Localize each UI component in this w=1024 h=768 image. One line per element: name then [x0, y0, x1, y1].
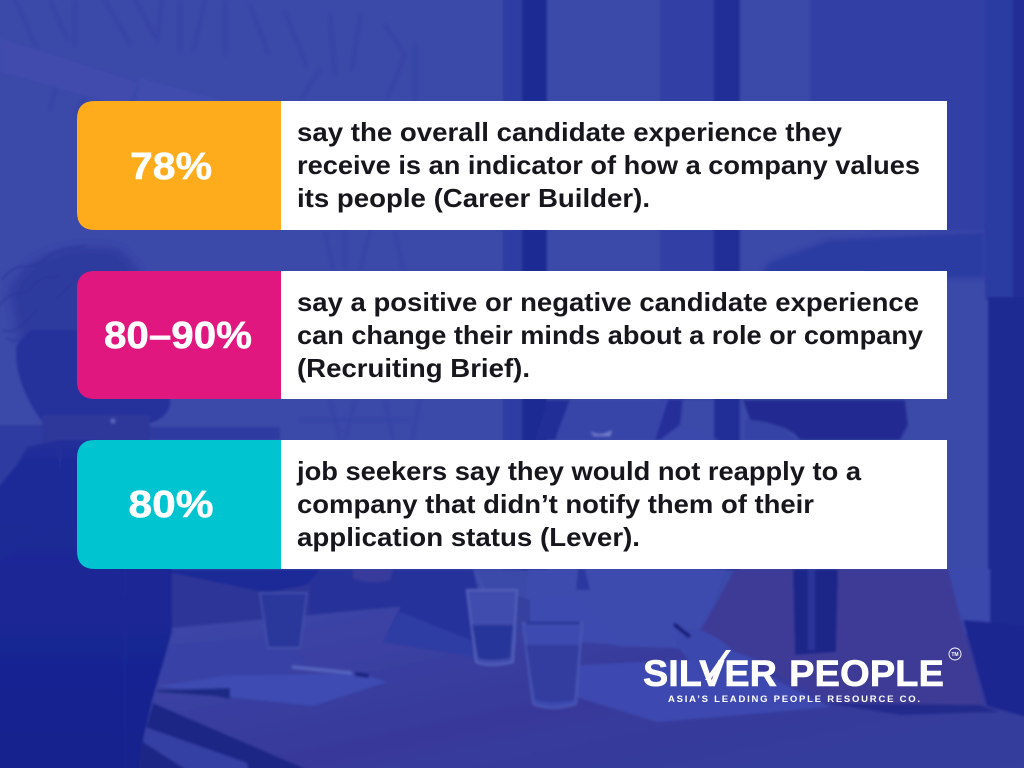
wall shelf highlights: [0, 38, 138, 108]
notebook: [157, 673, 387, 706]
man's shirt: [523, 569, 727, 648]
logo check mark: [705, 650, 731, 680]
row 1 value badge: 78%: [130, 146, 212, 188]
row 3 value badge: [77, 440, 281, 569]
row 3 text panel: job seekers say they would not reapply to a: [296, 456, 862, 486]
row 1 text panel: receive is an indicator of how a company values: [297, 150, 920, 180]
logo trademark: TM: [951, 652, 959, 658]
logo trademark: [949, 648, 961, 660]
table front edge: [130, 703, 350, 768]
faces above panel three: [535, 400, 908, 440]
row 2 text panel: [281, 271, 947, 399]
drinking glasses: [260, 590, 582, 708]
row 1 text panel: [281, 101, 947, 230]
row 3 value badge: 80%: [128, 484, 214, 526]
row 3 text panel: [281, 440, 947, 569]
floor band behind seated figure: [0, 425, 75, 575]
row 1 text panel: its people (Career Builder).: [297, 183, 650, 213]
logo: Silver People: [643, 648, 961, 705]
hand behind glass: [505, 592, 530, 640]
row 1 value badge: [77, 101, 281, 230]
row 1: 78% statistic: [77, 101, 947, 230]
logo tagline: ASIA’S LEADING PEOPLE RESOURCE CO.: [668, 694, 920, 705]
shadow under sleeve: [825, 703, 1000, 715]
tablet: [383, 569, 478, 657]
paper: [577, 660, 830, 722]
logo: Silver People: SILVER: [643, 652, 777, 694]
logo: Silver People: PEOPLE: [789, 652, 944, 694]
window and chair right: [948, 569, 990, 624]
row 2 text panel: can change their minds about a role or company: [297, 320, 924, 350]
row 3: 80% statistic: [77, 440, 947, 569]
wall behind table: [160, 569, 420, 640]
wall columns: [503, 0, 1024, 627]
table: [153, 600, 1024, 768]
row 3 text panel: application status (Lever).: [297, 522, 640, 552]
seated person left: arm, hand: [172, 569, 320, 593]
row 1 text panel: say the overall candidate experience they: [297, 117, 843, 147]
row 2: 80–90% statistic: [77, 271, 947, 399]
woman's jacket: [700, 569, 983, 705]
row 3 text panel: company that didn’t notify them of their: [297, 489, 814, 519]
wall lettering: [15, 0, 420, 440]
row 2 value badge: 80–90%: [104, 315, 252, 357]
hand holding phone: [676, 629, 762, 680]
pen: [292, 667, 352, 673]
row 2 value badge: [77, 271, 281, 399]
plant behind panels: [760, 232, 985, 278]
row 2 text panel: say a positive or negative candidate experience: [297, 287, 919, 317]
jacket: [0, 440, 172, 768]
neck and earring: [42, 415, 150, 445]
row 2 text panel: (Recruiting Brief).: [297, 353, 530, 383]
person left: curly hair: [0, 246, 170, 445]
